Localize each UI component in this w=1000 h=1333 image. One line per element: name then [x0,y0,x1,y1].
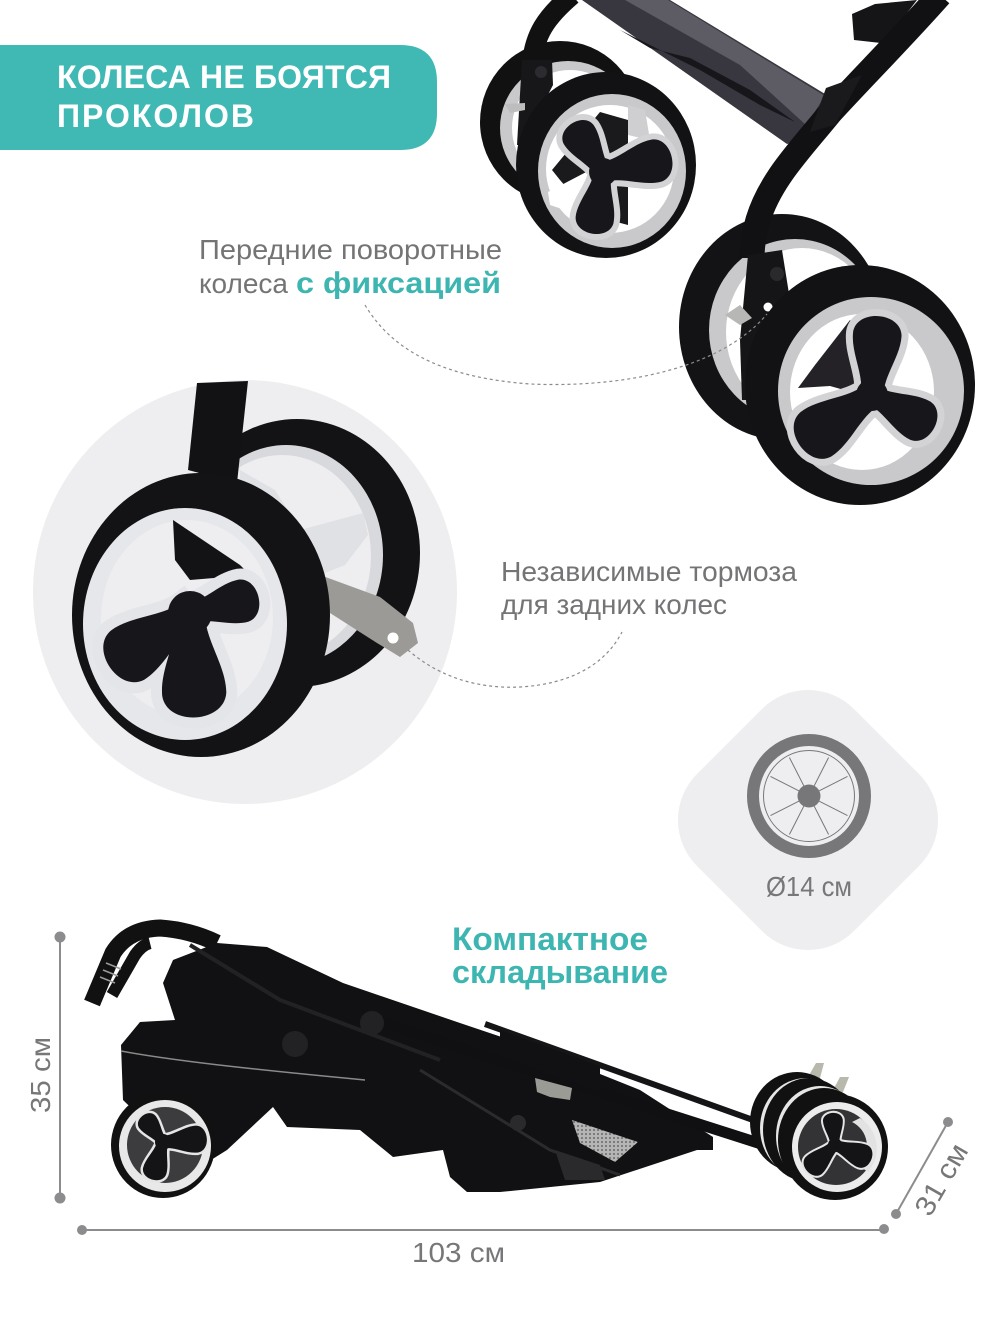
photo: folded stroller [92,928,888,1200]
dimension: width: 31 см [908,1138,974,1221]
front right wheel [745,265,975,505]
brake lever [320,575,418,657]
frame clamp [852,0,917,44]
dimension: height [25,932,66,1204]
dimension: length [77,1224,889,1268]
icon: wheel [753,740,865,852]
title banner: КОЛЕСА НЕ БОЯТСЯ [57,59,391,95]
dimension: length: 103 см [412,1237,505,1268]
fork tube [188,381,248,483]
callout: independent brakes: для задних колес [501,589,727,620]
heading: compact folding: складывание [452,954,668,990]
seam line [121,1051,365,1080]
panel: rear wheel close-up circle [33,380,457,804]
heading: compact folding [452,921,668,990]
folded fabric body [121,943,713,1192]
dotted leader: brakes [408,632,622,687]
gray plate [535,1078,572,1100]
photo: stroller front wheels [480,0,975,505]
front rear wheel [72,473,330,757]
callout: independent brakes: Независимые тормоза [501,556,797,587]
back left wheel [480,41,640,203]
rear wheel [111,1092,215,1198]
front left wheel [516,72,696,258]
callout: front swivel wheels: колеса [199,268,288,299]
handle [92,928,217,1003]
left fork [505,0,572,145]
callout: front swivel wheels: с фиксацией [296,267,501,300]
main frame tube [725,0,940,400]
callout: independent brakes [501,556,797,620]
front wheels stack [750,1063,888,1200]
panel: wheel diameter badge [651,663,965,977]
callout: front swivel wheels: Передние поворотные [199,234,502,265]
dimension: width [891,1117,974,1221]
back rear wheel [174,419,420,687]
title banner [0,45,437,150]
callout: front swivel wheels [199,234,502,300]
panel: wheel diameter badge: Ø14 см [766,871,852,902]
footrest plate [582,0,830,144]
dotted leader: front wheels [365,305,767,385]
heading: compact folding: Компактное [452,921,648,957]
folded basket mesh [572,1120,638,1162]
back right wheel [679,214,885,440]
title banner: ПРОКОЛОВ [57,98,254,134]
dimension: height: 35 см [25,1037,56,1113]
frame tubes [190,945,780,1180]
